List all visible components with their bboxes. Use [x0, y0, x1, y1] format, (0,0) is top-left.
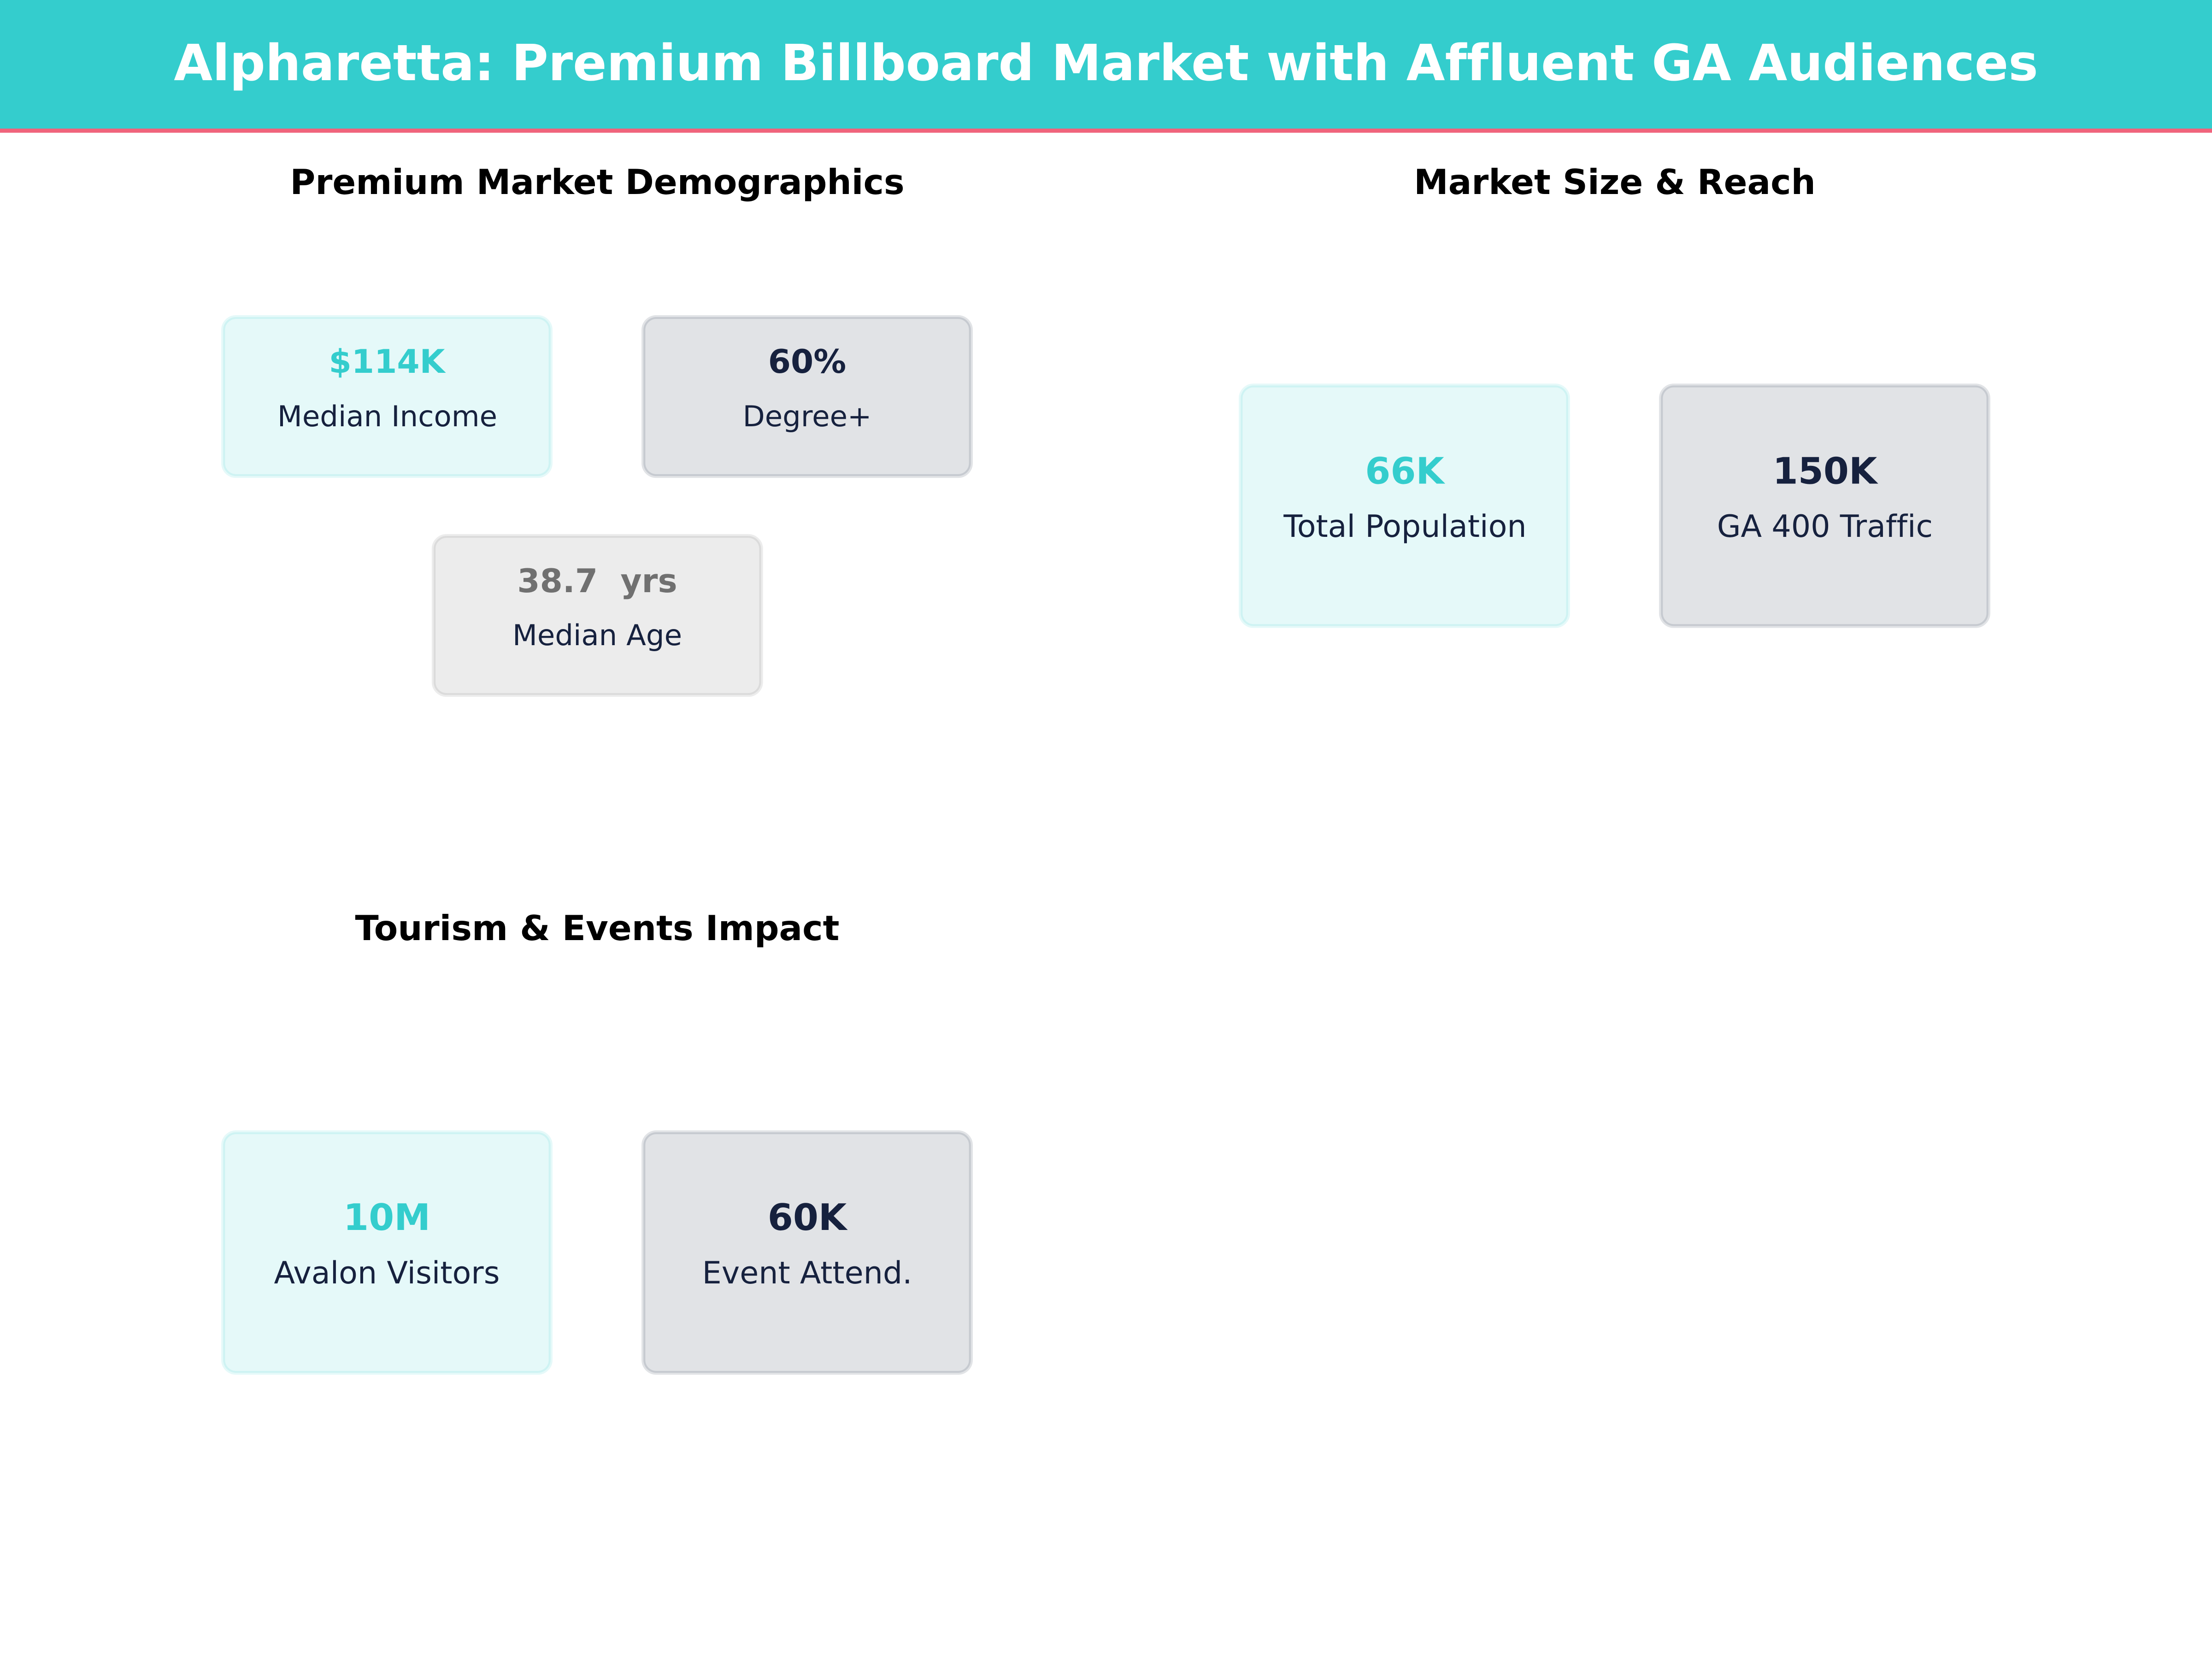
card: ga 400 traffic	[1661, 385, 1988, 626]
card: degree: Degree+	[743, 400, 871, 433]
card: total population: Total Population	[1283, 508, 1527, 544]
card: ga 400 traffic: GA 400 Traffic	[1717, 508, 1933, 544]
header banner	[0, 0, 2212, 133]
card: avalon visitors: 10M	[343, 1196, 430, 1239]
heading: tourism and events impact: Tourism & Events Impact	[355, 908, 839, 948]
heading: market size and reach: Market Size & Reach	[1414, 162, 1816, 202]
card: event attendance: Event Attend.	[702, 1255, 912, 1291]
card: event attendance: 60K	[768, 1196, 848, 1239]
card: median age	[434, 536, 761, 695]
card: median income: Median Income	[277, 400, 497, 433]
card: degree: 60%	[768, 342, 846, 381]
panel: premium market demographics	[223, 162, 971, 695]
card: degree	[643, 317, 971, 476]
title: Alpharetta: Premium Billboard Market with Affluent GA Audiences	[174, 34, 2038, 92]
card: median age: 38.7 yrs	[517, 562, 677, 600]
card: ga 400 traffic: 150K	[1773, 450, 1878, 492]
card: total population: 66K	[1365, 450, 1445, 492]
card: median income	[223, 317, 551, 476]
card: median income: $114K	[329, 342, 446, 381]
heading: premium market demographics: Premium Market Demographics	[290, 162, 905, 202]
panel: market size and reach	[1241, 162, 1988, 626]
card: avalon visitors	[223, 1132, 551, 1373]
card: avalon visitors: Avalon Visitors	[274, 1255, 500, 1291]
card: median age: Median Age	[512, 618, 682, 652]
card: event attendance	[643, 1132, 971, 1373]
card: total population	[1241, 385, 1568, 626]
panel: tourism and events impact	[223, 908, 971, 1373]
